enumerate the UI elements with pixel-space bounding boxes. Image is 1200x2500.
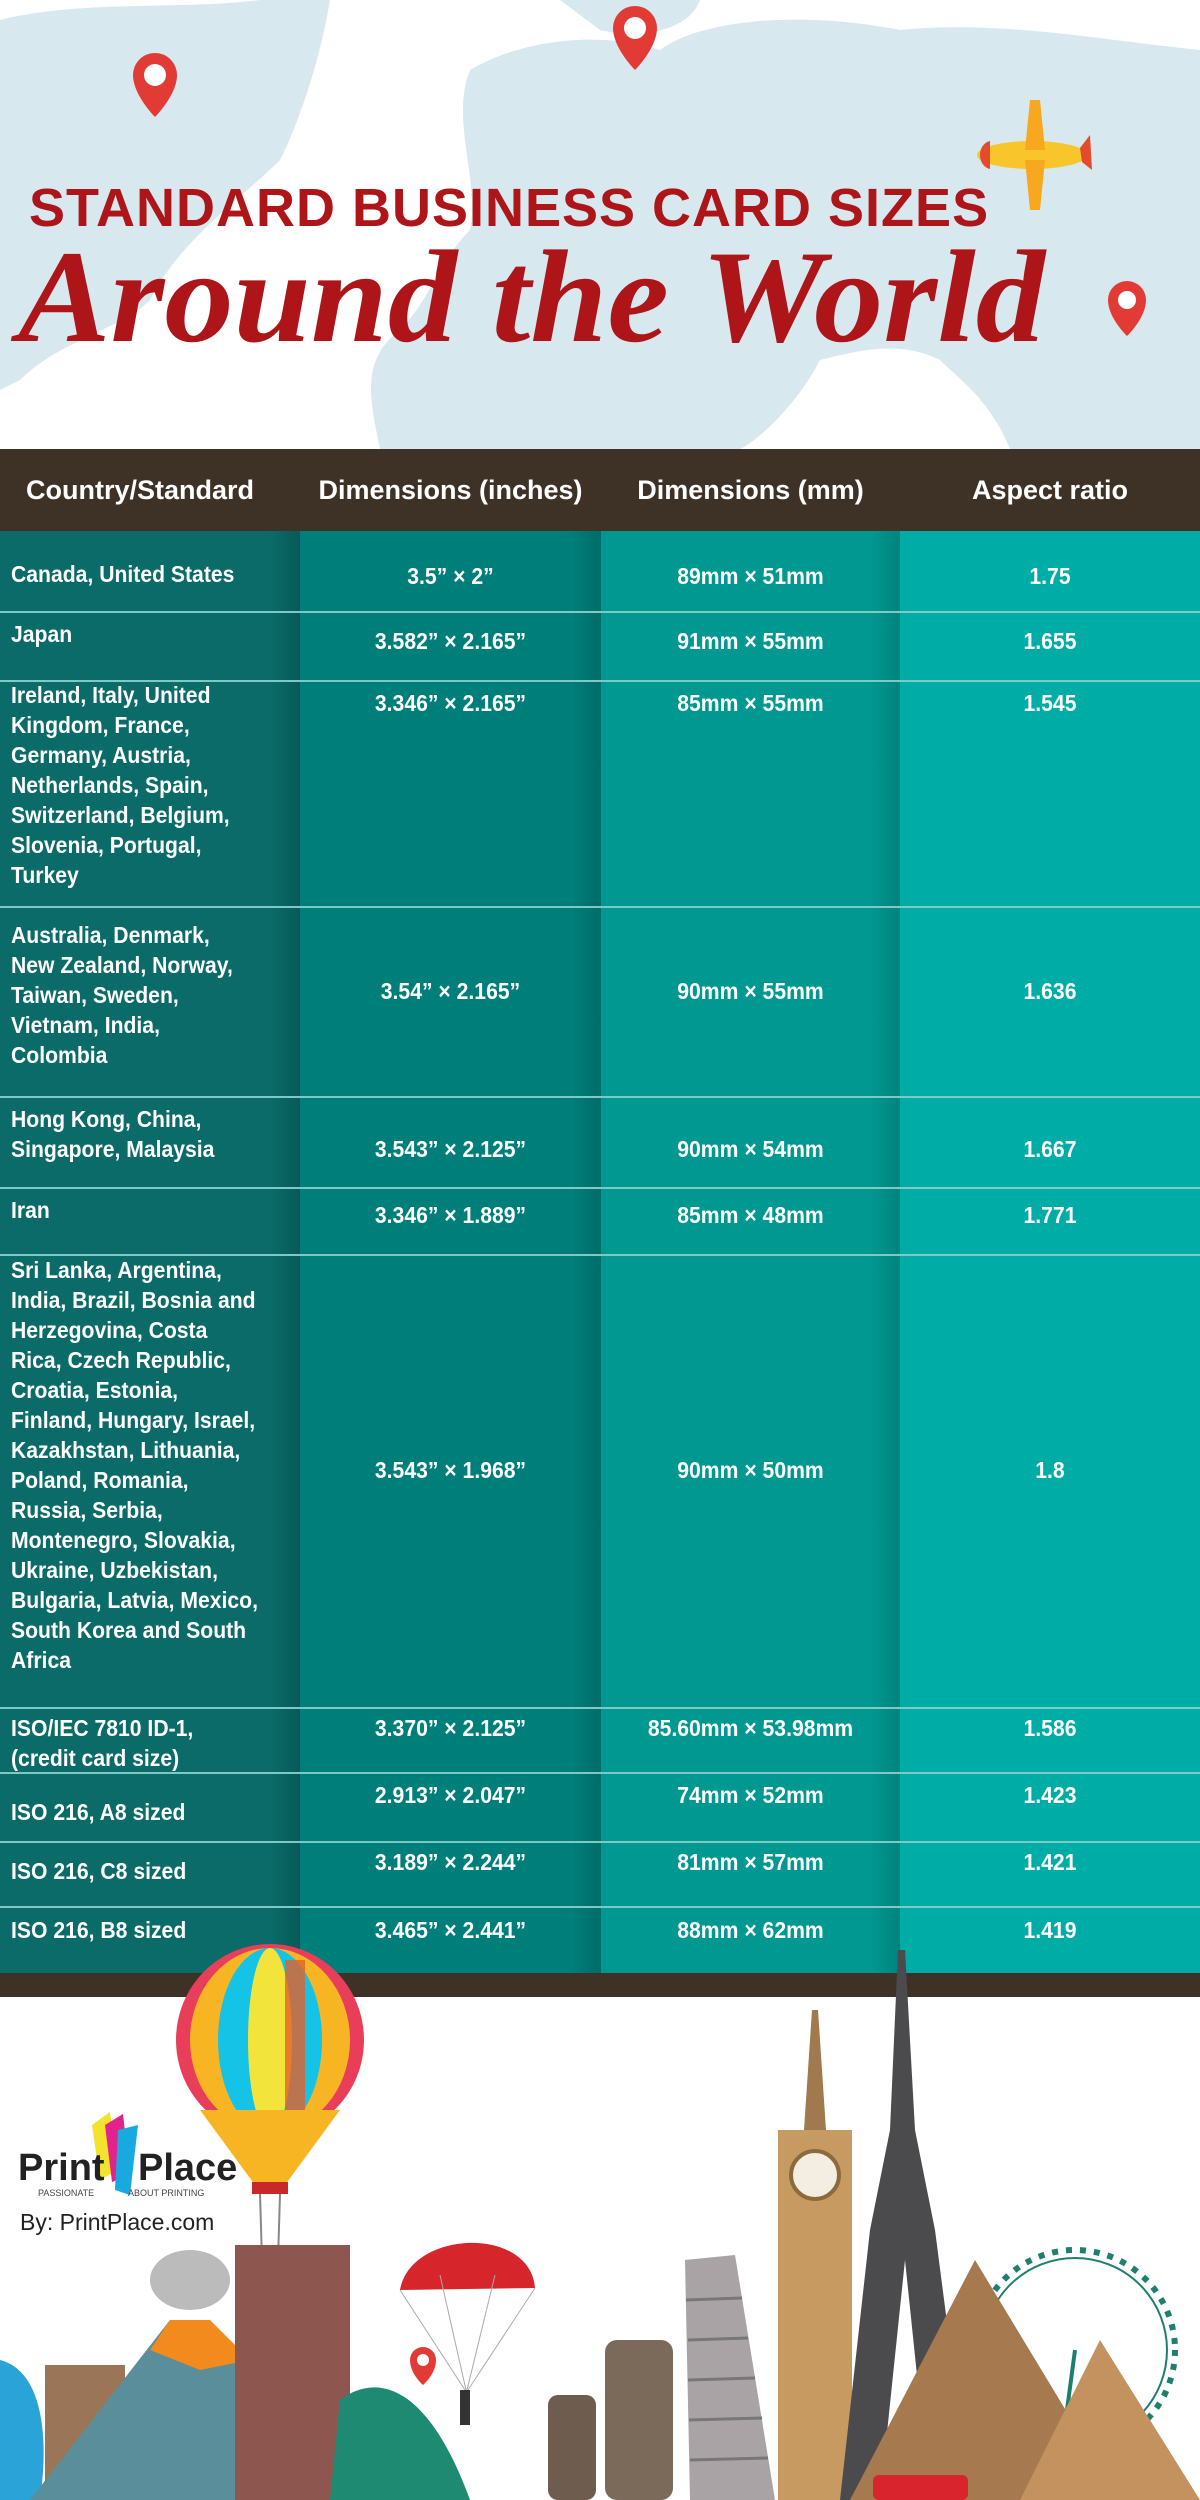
header labels: Country/Standard — [26, 475, 254, 505]
row: Sri Lanka etc: Finland, Hungary, Israel, — [11, 1407, 255, 1433]
icon: London bus — [873, 2475, 968, 2500]
row: Europe: Switzerland, Belgium, — [11, 802, 230, 828]
subtitle script: Around the World — [18, 223, 1045, 370]
row: Sri Lanka etc: Rica, Czech Republic, — [11, 1347, 231, 1373]
text: 89mm × 51mm — [677, 563, 824, 589]
text: 74mm × 52mm — [677, 1782, 824, 1808]
row: Australia: Australia, Denmark, — [11, 922, 210, 948]
row: Japan: Japan — [11, 621, 72, 647]
row: Sri Lanka etc: Croatia, Estonia, — [11, 1377, 178, 1403]
text: 3.346” × 2.165” — [375, 690, 526, 716]
text: 91mm × 55mm — [677, 628, 824, 654]
text: 1.586 — [1024, 1715, 1076, 1741]
row: Europe: Kingdom, France, — [11, 712, 190, 738]
row: Sri Lanka etc: Montenegro, Slovakia, — [11, 1527, 236, 1553]
icon: pyramids — [850, 2260, 1200, 2500]
row: Sri Lanka etc: Sri Lanka, Argentina, — [11, 1257, 222, 1283]
row: Sri Lanka etc: South Korea and South — [11, 1617, 246, 1643]
text: 3.465” × 2.441” — [375, 1917, 526, 1943]
row: Sri Lanka etc — [11, 1257, 258, 1673]
text: 85.60mm × 53.98mm — [648, 1715, 853, 1741]
row: Sri Lanka etc: Ukraine, Uzbekistan, — [11, 1557, 218, 1583]
text: 85mm × 55mm — [677, 690, 824, 716]
text: 1.8 — [1035, 1457, 1065, 1483]
row: Australia: Taiwan, Sweden, — [11, 982, 179, 1008]
row: Sri Lanka etc: India, Brazil, Bosnia and — [11, 1287, 256, 1313]
table — [0, 449, 1200, 1997]
icon: map pins — [133, 6, 1146, 336]
column backgrounds — [0, 531, 300, 1973]
icon: airplane — [977, 100, 1092, 210]
icon: Eiffel tower — [840, 1950, 970, 2500]
icon: hot air balloon — [176, 1944, 364, 2292]
logo: PrintPlace: By: PrintPlace.com — [20, 2209, 214, 2235]
text: 2.913” × 2.047” — [375, 1782, 526, 1808]
row: Australia: Vietnam, India, — [11, 1012, 160, 1038]
text: 85mm × 48mm — [677, 1202, 824, 1228]
icon: leaning tower of Pisa — [685, 2255, 775, 2500]
row: Europe — [11, 682, 230, 888]
text: 3.543” × 1.968” — [375, 1457, 526, 1483]
row: Hong Kong: Singapore, Malaysia — [11, 1136, 214, 1162]
text: 3.5” × 2” — [407, 563, 494, 589]
logo: PrintPlace: ABOUT PRINTING — [128, 2188, 204, 2198]
text: 81mm × 57mm — [677, 1849, 824, 1875]
icon: volcano and mountains — [0, 2245, 470, 2500]
row: Sri Lanka etc: Poland, Romania, — [11, 1467, 189, 1493]
text: 1.419 — [1024, 1917, 1076, 1943]
row: Europe: Slovenia, Portugal, — [11, 832, 201, 858]
row: Hong Kong — [11, 1106, 215, 1162]
text: 1.771 — [1024, 1202, 1076, 1228]
text: 3.189” × 2.244” — [375, 1849, 526, 1875]
text: Dimensions (inches) — [318, 475, 583, 505]
text: 1.75 — [1029, 563, 1071, 589]
row: Sri Lanka etc: Herzegovina, Costa — [11, 1317, 207, 1343]
illustration: landmarks — [0, 1944, 1200, 2500]
row: ISO/IEC: ISO/IEC 7810 ID-1, — [11, 1715, 193, 1741]
text: 3.346” × 1.889” — [375, 1202, 526, 1228]
icon: parachute — [400, 2243, 535, 2425]
text: Aspect ratio — [972, 475, 1128, 505]
row: Canada: Canada, United States — [11, 561, 234, 587]
row: C8: ISO 216, C8 sized — [11, 1858, 186, 1884]
row: ISO/IEC: (credit card size) — [11, 1745, 179, 1771]
text: 90mm × 55mm — [677, 978, 824, 1004]
logo: PrintPlace: Print — [18, 2147, 105, 2189]
text: 1.667 — [1024, 1136, 1076, 1162]
row: ISO/IEC — [11, 1715, 193, 1771]
title: STANDARD BUSINESS CARD SIZES — [29, 178, 989, 238]
background: world map — [0, 0, 1200, 449]
row: Hong Kong: Hong Kong, China, — [11, 1106, 201, 1132]
text: 1.545 — [1024, 690, 1076, 716]
text: 3.543” × 2.125” — [375, 1136, 526, 1162]
logo: PrintPlace: PASSIONATE — [38, 2188, 94, 2198]
text: 1.421 — [1024, 1849, 1076, 1875]
icon: ferris wheel — [975, 2250, 1175, 2500]
row: A8: ISO 216, A8 sized — [11, 1799, 185, 1825]
row: Australia: New Zealand, Norway, — [11, 952, 233, 978]
text: 90mm × 54mm — [677, 1136, 824, 1162]
text: 1.423 — [1024, 1782, 1076, 1808]
text: Dimensions (mm) — [637, 475, 864, 505]
row: Iran: Iran — [11, 1197, 50, 1223]
row: Australia: Colombia — [11, 1042, 107, 1068]
icon: Big Ben — [778, 2010, 852, 2500]
text: 3.370” × 2.125” — [375, 1715, 526, 1741]
text: 90mm × 50mm — [677, 1457, 824, 1483]
row: B8: ISO 216, B8 sized — [11, 1917, 186, 1943]
icon: moai statues — [548, 2340, 673, 2500]
row: Europe: Turkey — [11, 862, 79, 888]
text: 3.54” × 2.165” — [381, 978, 520, 1004]
row: Europe: Germany, Austria, — [11, 742, 191, 768]
text: 88mm × 62mm — [677, 1917, 824, 1943]
logo: PrintPlace: Place — [138, 2147, 237, 2189]
text: 3.582” × 2.165” — [375, 628, 526, 654]
text: 1.655 — [1024, 628, 1076, 654]
row: Sri Lanka etc: Russia, Serbia, — [11, 1497, 163, 1523]
row: Europe: Netherlands, Spain, — [11, 772, 209, 798]
table header — [0, 449, 1200, 531]
logo: PrintPlace — [18, 2112, 237, 2235]
row: Sri Lanka etc: Africa — [11, 1647, 71, 1673]
row: Sri Lanka etc: Bulgaria, Latvia, Mexico, — [11, 1587, 258, 1613]
text: 1.636 — [1024, 978, 1076, 1004]
row: Australia — [11, 922, 233, 1068]
row: Sri Lanka etc: Kazakhstan, Lithuania, — [11, 1437, 240, 1463]
row: Europe: Ireland, Italy, United — [11, 682, 210, 708]
